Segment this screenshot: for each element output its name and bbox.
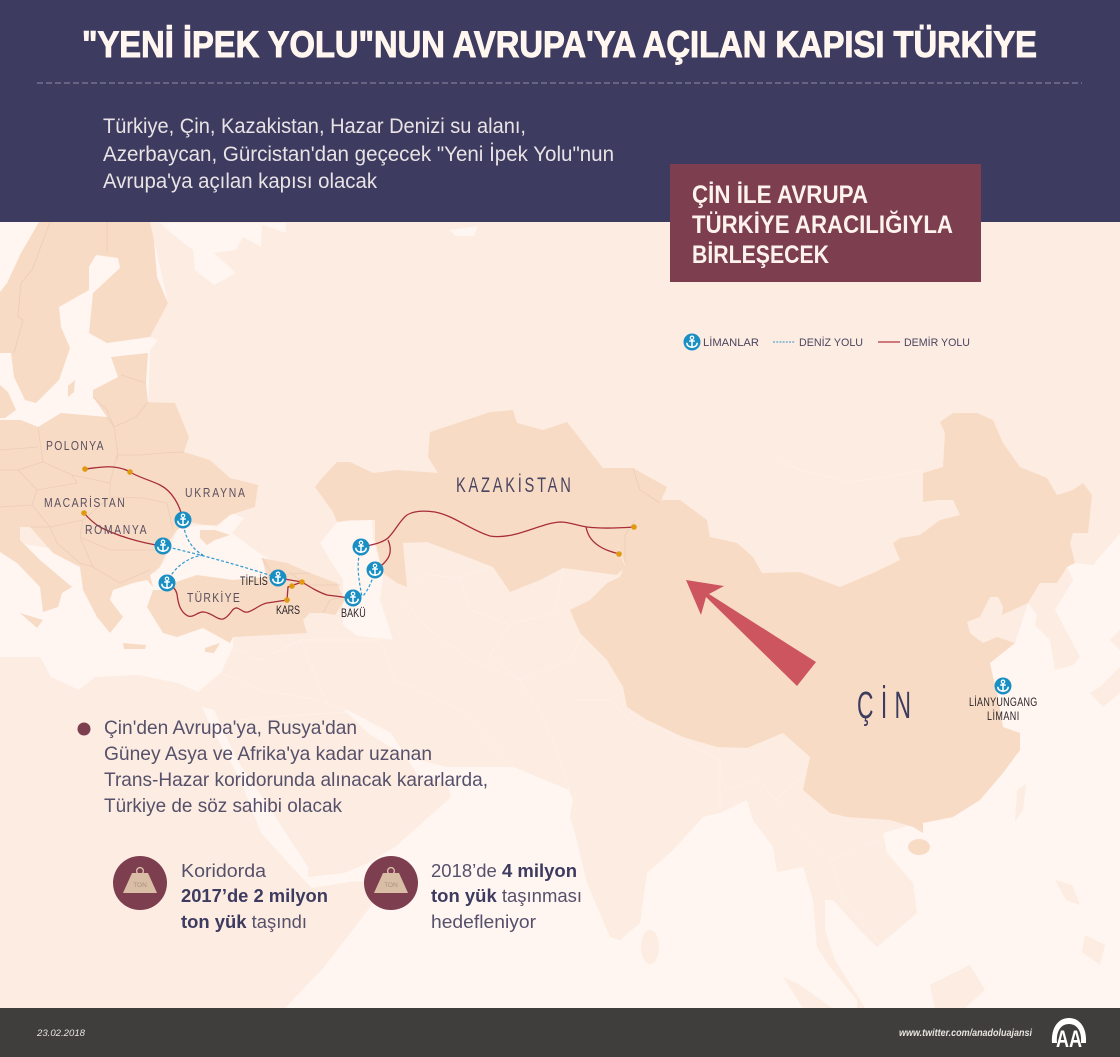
icon: weight 2018: TON [384,882,398,889]
legend: ports [684,334,700,350]
stat: 2017: 2017’de 2 milyon [181,886,328,906]
stat: 2018 [431,861,582,932]
stat: 2017: Koridorda [181,861,267,881]
China label: ÇİN [857,684,911,726]
bullet note [78,717,488,817]
callout box [670,164,981,282]
callout box: TÜRKİYE ARACILIĞIYLA [692,210,953,239]
icon: weight 2018 [364,856,418,910]
city labels: LİMANI [987,709,1019,723]
logo: AA [1052,1018,1086,1053]
map labels [44,439,571,605]
highlighted countries: Europe [0,353,258,633]
intro text [103,115,614,193]
header band [0,0,1120,222]
highlighted countries: Turkey and Caucasus [147,558,345,643]
stat: 2017 [181,861,328,932]
icon: weight 2017: TON [133,882,147,889]
stat: 2018: 2018’de 4 milyon [431,861,577,881]
map labels: KAZAKİSTAN [456,473,571,497]
route end dots [81,466,637,603]
intro text: Azerbaycan, Gürcistan'dan geçecek "Yeni İpek Yolu"nun [103,143,614,166]
date: 23.02.2018 [36,1028,86,1039]
legend: DENİZ YOLU [799,336,863,349]
stat: 2017: ton yük taşındı [181,912,307,932]
bullet note: Trans-Hazar koridorunda alınacak kararlarda, [104,769,488,791]
highlighted countries: Kazakhstan [315,410,667,592]
twitter link text: www.twitter.com/anadoluajansi [899,1028,1032,1039]
logo: AA: AA [1056,1026,1082,1053]
callout box: ÇİN İLE AVRUPA [692,181,868,209]
seas [0,222,1120,1008]
intro text: Türkiye, Çin, Kazakistan, Hazar Denizi su alanı, [103,115,526,138]
map labels: POLONYA [46,439,104,453]
callout box: BİRLEŞECEK [692,241,829,269]
map labels: MACARİSTAN [44,496,125,510]
highlighted countries: Scandinavia [0,222,168,403]
intro text: Avrupa'ya açılan kapısı olacak [103,170,377,193]
bullet note: Güney Asya ve Afrika'ya kadar uzanan [104,743,432,765]
highlighted countries: Denmark and islands [0,380,220,653]
city labels: KARS [276,604,300,617]
city labels [240,574,1037,723]
faint borders on light land [221,460,923,945]
legend: LİMANLAR [703,336,759,349]
light land: Korea, Japan, islands [641,567,1120,1008]
city labels: TİFLİS [240,574,268,588]
map labels: UKRAYNA [185,486,245,500]
footer bar [0,1008,1120,1057]
map labels: TÜRKİYE [187,591,240,605]
bullet note: Türkiye de söz sahibi olacak [104,795,342,817]
Hainan [908,839,930,855]
highlighted countries: China [570,413,1092,833]
Crimea [200,530,230,545]
map background [0,222,1120,1008]
map labels: ROMANYA [85,523,147,537]
city labels: BAKÜ [341,607,366,620]
sea routes [163,520,375,597]
bullet note: Çin'den Avrupa'ya, Rusya'dan [104,717,357,739]
rail routes [84,467,634,619]
legend: DEMİR YOLU [904,336,970,349]
red arrow [686,580,816,686]
country borders [0,222,660,613]
ports [154,512,1012,694]
stat: 2018: ton yük taşınması [431,886,582,906]
legend [684,334,970,350]
stat: 2018: hedefleniyor [431,912,536,932]
icon: weight 2017 [113,856,167,910]
city labels: LİANYUNGANG [969,695,1037,709]
